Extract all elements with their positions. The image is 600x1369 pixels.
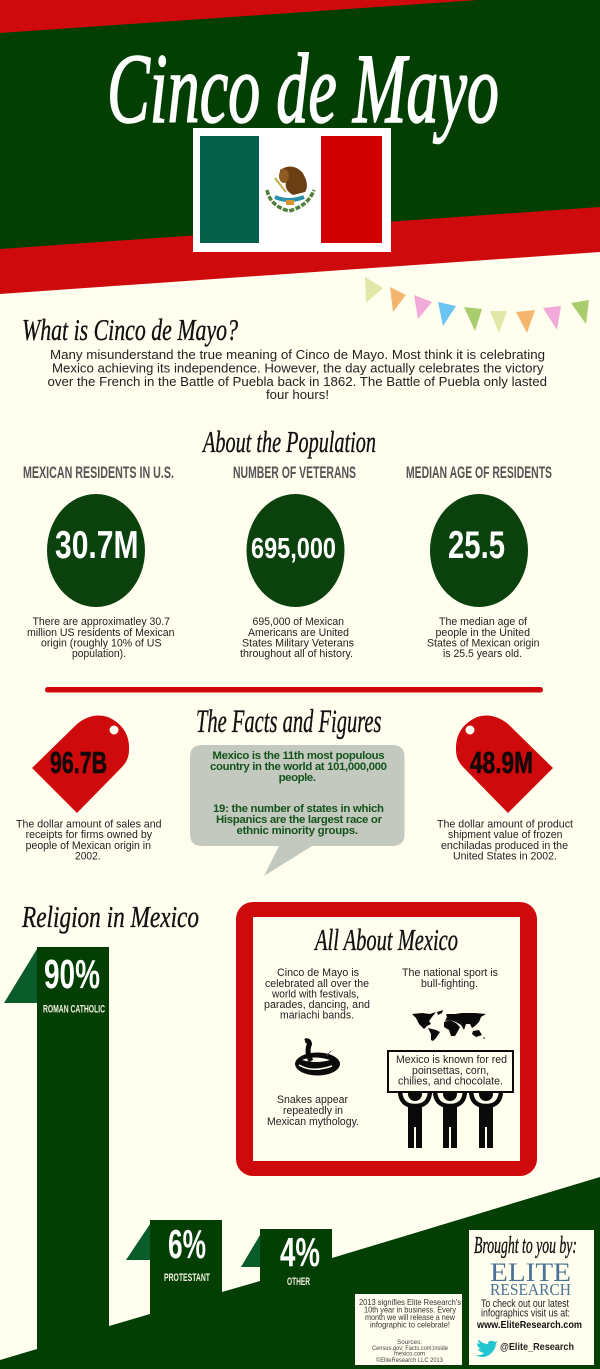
text: website call to action: www.EliteResearch.com (476, 1319, 582, 1331)
text: celebrations: world with festivals, (271, 988, 359, 1000)
heading: The Facts and Figures: The Facts and Figures (196, 704, 382, 740)
speech bubble: people. (279, 772, 316, 784)
stat: residents: 30.7M (55, 524, 138, 567)
text: sales description: The dollar amount of sales and (16, 818, 162, 830)
heading: Religion in Mexico: Religion in Mexico (21, 899, 199, 934)
intro paragraph (48, 347, 547, 402)
panel: anniversary and sources: month we will release a new (365, 1313, 455, 1322)
text: website call to action (476, 1298, 582, 1331)
column headings: MEXICAN RESIDENTS IN U.S. (23, 464, 174, 482)
person 3 (471, 1087, 501, 1148)
text: snakes: Mexican mythology. (267, 1116, 359, 1128)
speech bubble: ethnic minority groups. (236, 825, 358, 837)
panel: anniversary and sources: mexico.com (394, 1350, 425, 1358)
column headings (23, 464, 552, 482)
text: enchiladas description: enchiladas produced in the (441, 840, 568, 852)
panel: anniversary and sources: Census.gov; Facts.com;inside (372, 1345, 448, 1352)
text: residents description: There are approximatley 30.7 (32, 616, 170, 628)
text: median age description: is 25.5 years old. (443, 648, 522, 660)
text: median age description: The median age of (439, 616, 528, 628)
text: national sport: bull-fighting. (421, 978, 478, 990)
text: median age description: people in the United (436, 627, 530, 639)
text: enchiladas description: The dollar amount of product (437, 818, 573, 830)
religion bar chart (0, 947, 600, 1369)
text: veterans description: 695,000 of Mexican (252, 616, 344, 628)
bar: Other (241, 1229, 320, 1288)
text: enchiladas description (437, 818, 573, 862)
text: residents description (27, 616, 174, 660)
text: national sport (402, 967, 498, 990)
bar: Roman Catholic: ROMAN CATHOLIC (43, 1004, 105, 1016)
panel: anniversary and sources: 10th year in business. Every (364, 1306, 457, 1314)
price tag: 48.9M (456, 716, 553, 813)
text: snakes: repeatedly in (283, 1105, 343, 1117)
speech bubble: 19: the number of states in which (213, 803, 384, 815)
text: enchiladas description: shipment value of frozen (448, 829, 562, 841)
text: median age description: States of Mexican origin (427, 638, 540, 650)
bar: Other: 4% (280, 1229, 320, 1275)
intro paragraph: over the French in the Battle of Puebla back in 1862. The Battle of Puebla only lasted (48, 374, 547, 389)
panel: Brought to you by (469, 1230, 594, 1365)
speech bubble: country in the world at 101,000,000 (210, 761, 387, 773)
panel: All About Mexico (236, 902, 537, 1176)
bar: Protestant: 6% (168, 1221, 206, 1267)
price tag: 96.7B (32, 716, 129, 813)
text: celebrations: celebrated all over the (265, 978, 369, 990)
price tag: 96.7B: 96.7B (50, 745, 107, 780)
text: sales description: people of Mexican origin in (26, 840, 151, 852)
person 2 (435, 1087, 465, 1148)
person 1 (400, 1087, 430, 1148)
intro paragraph: four hours! (266, 387, 329, 402)
bar: Roman Catholic (4, 949, 105, 1016)
stat: veterans: 695,000 (251, 533, 336, 565)
text: median age description (427, 616, 540, 660)
text: veterans description: Americans are United (248, 627, 349, 639)
text: enchiladas description: United States in 2002. (453, 850, 557, 862)
stat: residents (47, 494, 145, 607)
text: website call to action: infographics visit us at: (481, 1308, 570, 1320)
text: sales description: 2002. (75, 850, 101, 862)
speech bubble: Mexico is the 11th most populous (212, 750, 385, 762)
icon: snake (295, 1041, 340, 1076)
sign: Mexico is known for (388, 1051, 513, 1092)
icon: people holding sign (400, 1087, 501, 1148)
text: veterans description (240, 616, 354, 660)
text: celebrations: Cinco de Mayo is (277, 967, 359, 979)
panel heading: All About Mexico (314, 922, 458, 957)
bar: Roman Catholic: 90% (44, 951, 100, 997)
price tag: 48.9M: 48.9M (470, 745, 533, 780)
sign: Mexico is known for: chilies, and chocolate. (398, 1076, 503, 1088)
text: snakes (267, 1094, 359, 1128)
stat: median age (430, 494, 528, 607)
speech bubble (190, 745, 404, 876)
stat: median age: 25.5 (448, 524, 505, 567)
logo: Elite Research: ELITE (490, 1258, 571, 1287)
text: veterans description: throughout all of history. (240, 648, 353, 660)
twitter handle: @Elite_Research (500, 1341, 574, 1353)
text: snakes: Snakes appear (277, 1094, 348, 1106)
logo: Elite Research: RESEARCH (490, 1280, 571, 1299)
icon: twitter bird (475, 1340, 497, 1357)
intro paragraph: Mexico achieving its independence. However, the day actually celebrates the victory (52, 360, 544, 376)
panel: anniversary and sources: ©EliteResearch LLC 2013 (376, 1356, 443, 1364)
logo: Elite Research (490, 1258, 571, 1299)
text: celebrations (264, 967, 370, 1022)
speech bubble: Hispanics are the largest race or (216, 814, 383, 826)
sign: Mexico is known for: Mexico is known for red (396, 1054, 507, 1066)
text: veterans description: States Military Veterans (242, 638, 354, 650)
bar: Other: OTHER (287, 1276, 310, 1288)
text: sales description: receipts for firms owned by (26, 829, 152, 841)
text: residents description: population). (72, 648, 126, 660)
intro paragraph: Many misunderstand the true meaning of Cinco de Mayo. Most think it is celebrating (50, 347, 545, 362)
text: sales description (16, 818, 162, 862)
icon: Mexican flag (193, 128, 391, 252)
text: national sport: The national sport is (402, 967, 498, 979)
bunting decoration (365, 277, 589, 333)
text: website call to action: To check out our latest (481, 1298, 569, 1310)
text: celebrations: parades, dancing, and (264, 999, 370, 1011)
panel: anniversary and sources: 2013 signifies Elite Research's (359, 1298, 461, 1307)
column headings: NUMBER OF VETERANS (233, 464, 356, 482)
sign: Mexico is known for: poinsettas, corn, (412, 1065, 489, 1077)
header banner (0, 0, 600, 294)
stat: veterans (246, 494, 344, 607)
heading: What is Cinco de Mayo: What is Cinco de Mayo? (22, 312, 238, 347)
text: residents description: origin (roughly 10% of US (41, 638, 162, 650)
panel: anniversary and sources (355, 1294, 462, 1365)
panel: anniversary and sources: Sources: (397, 1339, 422, 1346)
panel: anniversary and sources: infographic to celebrate! (370, 1320, 450, 1330)
text: residents description: million US residents of Mexican (27, 627, 174, 639)
heading: About the Population: About the Population (202, 424, 376, 459)
text: celebrations: mariachi bands. (280, 1010, 354, 1022)
flag emblem (267, 166, 314, 211)
bar: Protestant: PROTESTANT (164, 1272, 210, 1284)
icon: world map (412, 1010, 486, 1041)
bar: Protestant (126, 1221, 210, 1284)
